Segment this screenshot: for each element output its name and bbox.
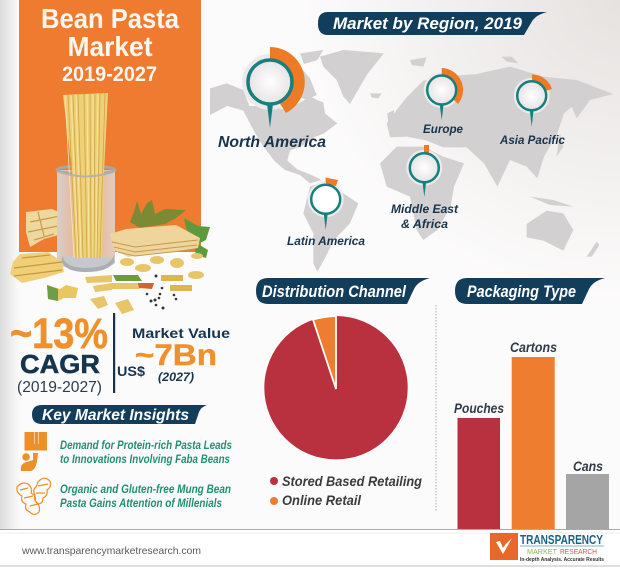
divider: stats bbox=[113, 313, 115, 393]
pasta bundle left bbox=[26, 209, 68, 247]
pie chart: distribution channel bbox=[264, 316, 408, 459]
stat: market value: (2027) bbox=[158, 372, 194, 384]
pin: asia pacific: Asia Pacific bbox=[499, 133, 565, 147]
insight text 2 bbox=[60, 482, 231, 510]
logo: transparency market research: MARKET bbox=[527, 549, 558, 556]
title: Bean Pasta bbox=[41, 3, 179, 34]
footer url: www.transparencymarketresearch.com bbox=[21, 545, 201, 557]
pin: middle east and africa bbox=[391, 145, 459, 231]
pin: middle east and africa: Middle East bbox=[391, 202, 459, 216]
pin: latin america bbox=[287, 178, 365, 248]
legend: distribution channel: Online Retail bbox=[282, 492, 362, 508]
illustration: pasta jar and assorted pasta bbox=[10, 93, 210, 314]
stat: market value: Market Value bbox=[132, 325, 230, 341]
jar bbox=[57, 166, 115, 269]
pin: latin america: Latin America bbox=[287, 234, 365, 248]
heading: market by region: Market by Region, 2019 bbox=[333, 14, 523, 33]
logo: transparency market research bbox=[490, 532, 604, 563]
stat: market value: ~7Bn bbox=[135, 339, 217, 372]
stat: market value: US$ bbox=[117, 363, 145, 379]
bar chart: packaging type bbox=[454, 339, 609, 529]
title: 2019-2027 bbox=[62, 63, 157, 86]
legend: distribution channel: Stored Based Retailing bbox=[282, 473, 422, 489]
legend: distribution channel bbox=[270, 473, 422, 508]
lasagne stack bbox=[110, 225, 200, 257]
bar chart: packaging type: Cartons bbox=[510, 339, 557, 355]
logo: transparency market research: In-depth Analysis. Accurate Results bbox=[520, 557, 604, 563]
map: world map bbox=[210, 50, 613, 272]
title bbox=[41, 3, 179, 86]
insight text 2: Pasta Gains Attention of Millenials bbox=[60, 496, 222, 510]
stat: CAGR: ~13% bbox=[10, 310, 108, 358]
pasta bundle front bbox=[10, 252, 64, 283]
pin: north america: North America bbox=[218, 134, 326, 151]
jar rim front bbox=[57, 171, 115, 176]
plant bbox=[130, 200, 210, 258]
bar chart: packaging type: Cans bbox=[573, 458, 603, 474]
stat: CAGR: (2019-2027) bbox=[17, 379, 102, 396]
bow pasta bbox=[47, 285, 78, 301]
pin: europe: Europe bbox=[423, 122, 463, 136]
insight text 1: Demand for Protein-rich Pasta Leads bbox=[60, 438, 232, 452]
spaghetti bbox=[63, 93, 108, 258]
bar chart: packaging type: Pouches bbox=[454, 400, 504, 416]
logo: transparency market research: RESEARCH bbox=[560, 549, 597, 556]
peppercorns bbox=[146, 274, 177, 310]
title: Market bbox=[68, 31, 152, 62]
stat: CAGR bbox=[10, 310, 108, 396]
stat: market value bbox=[117, 325, 230, 384]
insight text 1 bbox=[60, 438, 232, 466]
heading: distribution channel: Distribution Channel bbox=[262, 282, 407, 301]
pin: north america bbox=[218, 47, 326, 151]
heading: packaging type: Packaging Type bbox=[467, 282, 576, 301]
insight text 1: to Innovations Involving Faba Beans bbox=[60, 452, 230, 466]
heading: packaging type bbox=[455, 278, 605, 304]
jar base bbox=[62, 255, 114, 272]
pin: europe bbox=[423, 68, 463, 136]
divider between charts bbox=[435, 305, 437, 511]
pin: middle east and africa: & Africa bbox=[401, 217, 448, 231]
icon: box and person bbox=[21, 432, 47, 471]
heading: market by region bbox=[318, 12, 547, 35]
stat: CAGR: CAGR bbox=[20, 349, 100, 379]
icon: pasta outline bbox=[17, 478, 51, 514]
panel: title panel bbox=[17, 0, 203, 255]
scattered pasta shapes bbox=[47, 253, 204, 314]
heading: key market insights: Key Market Insights bbox=[42, 407, 189, 424]
insight text 2: Organic and Gluten-free Mung Bean bbox=[60, 482, 231, 496]
pin: asia pacific bbox=[499, 74, 565, 147]
